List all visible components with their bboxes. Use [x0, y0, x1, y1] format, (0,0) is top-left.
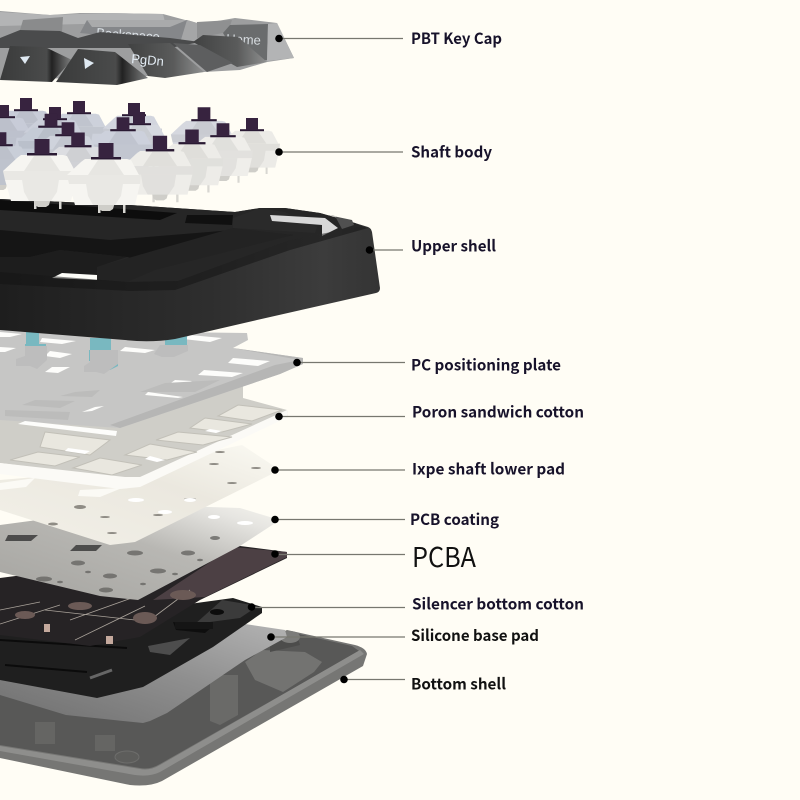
leader: PC positioning plate [293, 359, 405, 366]
label: PCBA: PCBA [412, 536, 477, 575]
upper shell [0, 199, 380, 341]
leader: PBT Key Cap [275, 35, 403, 42]
PBT key caps: PgDn [131, 51, 164, 69]
PBT key caps [0, 11, 294, 85]
right arrow key [56, 49, 148, 85]
leader: PCBA [271, 550, 405, 558]
leader: Silicone base pad [267, 633, 405, 641]
leader: Ixpe shaft lower pad [271, 466, 405, 474]
silicone base pad [0, 624, 287, 723]
leader: PCB coating [271, 516, 405, 523]
down arrow key [0, 46, 72, 82]
PC positioning plate [0, 330, 303, 436]
label: Silicone base pad: Silicone base pad [411, 624, 539, 646]
label: PC positioning plate: PC positioning plate [411, 354, 561, 376]
Ixpe shaft lower pad [0, 445, 280, 545]
label: Silencer bottom cotton: Silencer bottom cotton [412, 592, 584, 614]
Poron sandwich cotton [0, 386, 288, 489]
label: Upper shell: Upper shell [411, 234, 496, 256]
leader: Shaft body [275, 148, 403, 156]
PBT key caps: Home [226, 31, 261, 48]
PCB coating [0, 505, 280, 600]
PBT key caps: Backspace [96, 25, 160, 44]
PCBA [0, 546, 287, 646]
leader: Poron sandwich cotton [275, 413, 405, 420]
leader: Upper shell [366, 246, 403, 254]
leader: Bottom shell [340, 676, 405, 683]
PgDn key [128, 43, 204, 78]
label: PBT Key Cap: PBT Key Cap [411, 27, 502, 49]
label: PCB coating: PCB coating [410, 508, 499, 530]
silencer bottom cotton [0, 598, 262, 698]
dark row behind [0, 30, 200, 48]
shaft body: switches [0, 98, 280, 213]
stabilizers [16, 332, 188, 374]
label: Shaft body: Shaft body [411, 140, 492, 162]
leader: Silencer bottom cotton [248, 603, 405, 611]
label: Bottom shell: Bottom shell [411, 672, 506, 694]
label: Poron sandwich cotton: Poron sandwich cotton [412, 400, 584, 422]
bottom shell [0, 630, 367, 786]
label: Ixpe shaft lower pad: Ixpe shaft lower pad [412, 458, 565, 480]
